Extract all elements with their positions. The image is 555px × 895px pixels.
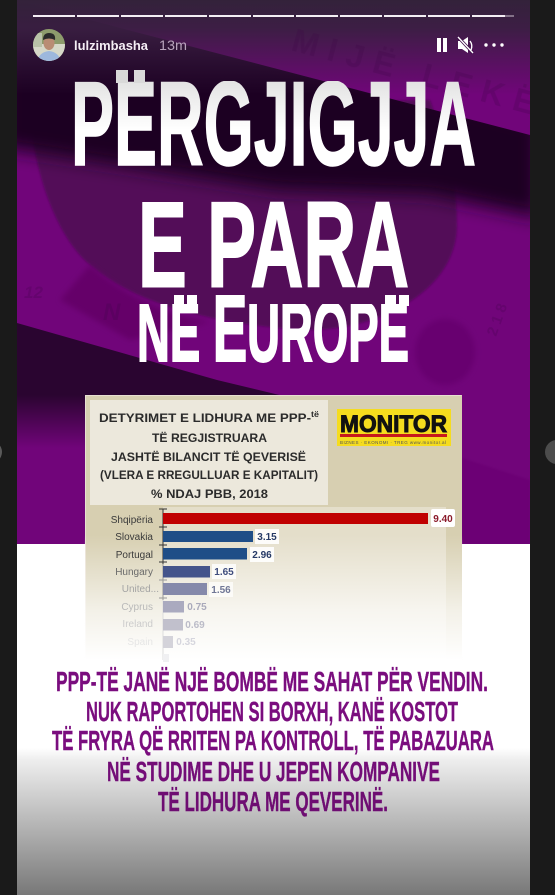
banknote text bbox=[24, 72, 530, 336]
icon: more dots bbox=[484, 43, 504, 47]
timestamp: 13m bbox=[159, 37, 187, 53]
chart title box: të bbox=[311, 410, 320, 419]
chart title box: % NDAJ PBB, 2018 bbox=[151, 487, 268, 501]
bar: Slovakia bbox=[115, 529, 279, 544]
banknote text: N bbox=[103, 299, 121, 326]
bar: Hungary: 1.65 bbox=[214, 567, 234, 578]
bar chart bbox=[111, 509, 455, 662]
progress bars bbox=[33, 15, 514, 17]
bar: Spain: 0.35 bbox=[176, 637, 196, 648]
bar: Slovakia: Slovakia bbox=[115, 532, 153, 543]
icon: muted speaker bbox=[458, 37, 473, 53]
bar: Hungary bbox=[115, 564, 236, 579]
bar: faded last row bbox=[163, 654, 169, 662]
card highlight edge bbox=[86, 396, 462, 665]
chart title box bbox=[90, 400, 328, 505]
bar: Spain: Spain bbox=[127, 637, 153, 648]
body text: TË LIDHURA ME QEVERINË. bbox=[158, 786, 388, 817]
card fade overlay bbox=[84, 535, 463, 666]
purple banknote background bbox=[0, 0, 540, 544]
bar: United: 1.56 bbox=[211, 585, 231, 596]
bar: Slovakia: 3.15 bbox=[257, 532, 277, 543]
lower white section bbox=[17, 544, 530, 750]
bar: Hungary: Hungary bbox=[115, 567, 153, 578]
title line 3: NË EUROPË bbox=[137, 276, 409, 382]
carousel arrow: left bbox=[0, 441, 2, 463]
bar: Ireland: Ireland bbox=[122, 619, 153, 630]
bar: Shqipëria: 9.40 bbox=[433, 514, 453, 525]
bar: United: United... bbox=[122, 584, 159, 595]
bar: Cyprus: 0.75 bbox=[187, 602, 207, 613]
bar: Portugal: 2.96 bbox=[252, 550, 272, 561]
chart card bbox=[84, 395, 463, 666]
username: lulzimbasha bbox=[74, 38, 149, 53]
bar: Cyprus: Cyprus bbox=[121, 602, 153, 613]
chart axis bbox=[159, 509, 167, 564]
bar: Cyprus bbox=[121, 601, 207, 613]
Monitor logo: MONITOR bbox=[340, 411, 447, 438]
banknote text: 12 bbox=[24, 283, 43, 302]
chart title box: (VLERA E RREGULLUAR E KAPITALIT) bbox=[100, 468, 318, 482]
bar: United bbox=[122, 582, 233, 597]
Monitor logo: BIZNES · EKONOMI · TREG www.monitor.al bbox=[340, 440, 446, 445]
banknote text: 2 1 8 bbox=[484, 301, 511, 338]
banknote text: MIJË LEKË bbox=[288, 22, 539, 121]
chart title box: TË REGJISTRUARA bbox=[152, 430, 267, 445]
chart title box: JASHTË BILANCIT TË QEVERISË bbox=[111, 449, 306, 464]
carousel arrow: right bbox=[545, 440, 555, 464]
chart title box: DETYRIMET E LIDHURA ME PPP- bbox=[99, 411, 289, 425]
avatar bbox=[33, 29, 65, 62]
bar: Portugal: Portugal bbox=[116, 550, 153, 561]
bar: Ireland bbox=[122, 619, 205, 631]
bar: Spain bbox=[127, 636, 196, 648]
bar: Portugal bbox=[116, 547, 274, 562]
bar: Ireland: 0.69 bbox=[185, 620, 205, 631]
bar: Shqipëria bbox=[111, 509, 455, 527]
title line 3 bbox=[140, 295, 409, 363]
chart plot area bbox=[163, 507, 446, 662]
card background bbox=[85, 395, 462, 665]
body text bbox=[52, 666, 494, 817]
lower grey gradient bbox=[17, 748, 530, 895]
title line 1 bbox=[74, 70, 475, 167]
icon: pause bbox=[437, 38, 447, 52]
bar: Shqipëria: Shqipëria bbox=[111, 515, 153, 526]
